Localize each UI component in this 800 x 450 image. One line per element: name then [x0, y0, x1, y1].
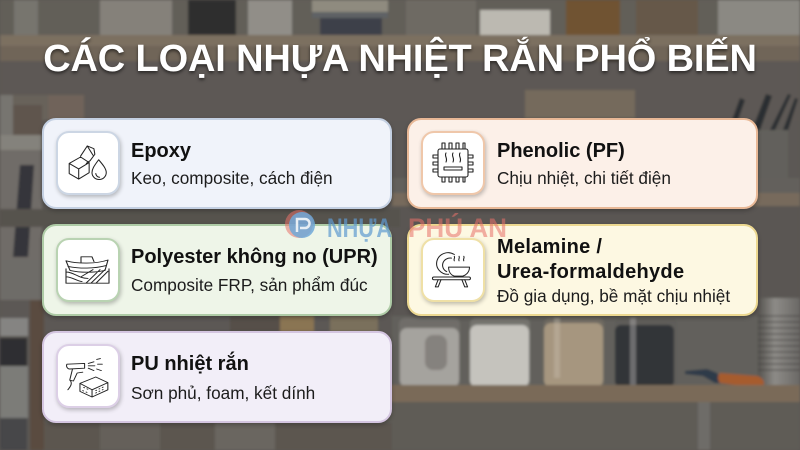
icon: dishes on a table — [421, 238, 485, 302]
icon: spray gun and foam block — [56, 344, 120, 408]
jars — [399, 318, 460, 388]
watermark logo: PHÚ AN — [408, 212, 507, 243]
metal can — [758, 298, 800, 386]
heading: Polyester không no (UPR) — [131, 246, 378, 268]
top row objects — [0, 0, 800, 36]
icon: heated chip — [421, 131, 485, 195]
watermark logo — [285, 210, 507, 243]
heading — [497, 236, 684, 283]
top shelf — [0, 35, 800, 46]
description: Chịu nhiệt, chi tiết điện — [497, 168, 671, 188]
icon: boat hull on composite — [56, 238, 120, 302]
heading: Epoxy — [131, 140, 191, 162]
description: Sơn phủ, foam, kết dính — [131, 383, 315, 403]
panel: Melamine — [407, 224, 758, 316]
panel: Phenolic — [407, 118, 758, 209]
right pencil cup — [732, 94, 798, 130]
icon: epoxy cube and drop — [56, 131, 120, 195]
heading: Phenolic (PF) — [497, 140, 625, 162]
heading: PU nhiệt rắn — [131, 353, 249, 375]
panel: Epoxy — [42, 118, 392, 209]
heading: Melamine / — [497, 236, 602, 258]
watermark logo: NHỰA — [327, 213, 392, 243]
description: Keo, composite, cách điện — [131, 168, 333, 188]
title: CÁC LOẠI NHỰA NHIỆT RẮN PHỔ BIẾN — [43, 38, 757, 80]
panel: PU — [42, 331, 392, 423]
panel: Polyester — [42, 224, 392, 316]
description: Composite FRP, sản phẩm đúc — [131, 275, 368, 295]
middle shelf — [392, 178, 800, 193]
lower shelf — [44, 385, 800, 402]
heading: Urea-formaldehyde — [497, 261, 684, 283]
description: Đồ gia dụng, bề mặt chịu nhiệt — [497, 286, 730, 306]
pliers — [685, 369, 723, 383]
